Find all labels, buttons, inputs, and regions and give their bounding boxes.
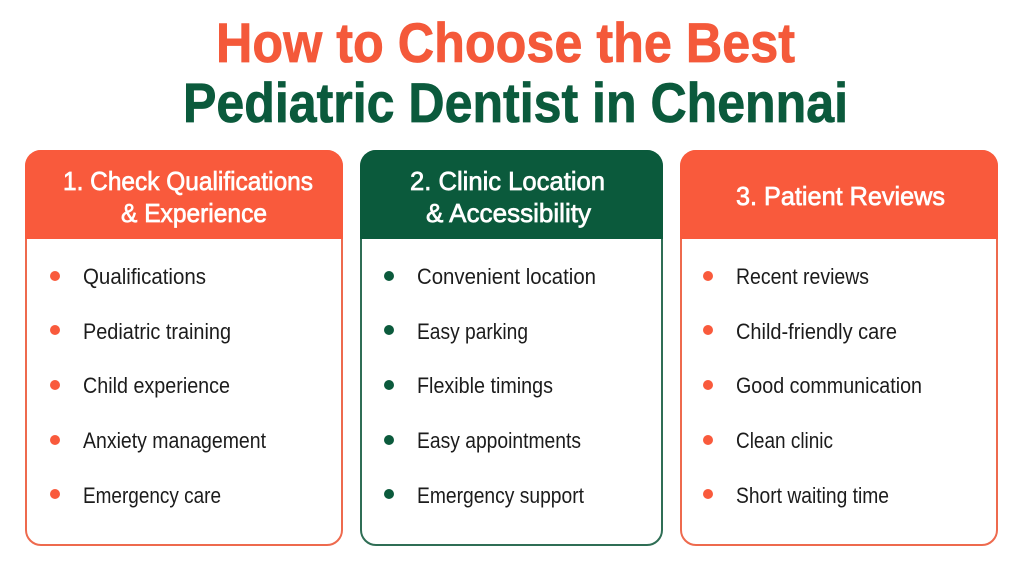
list: clinic location items: [384, 264, 596, 508]
list: patient reviews items: Good communication: [736, 373, 922, 398]
list: qualifications items: Pediatric training: [83, 319, 231, 344]
panel header: clinic location: [360, 150, 663, 239]
list: qualifications items: Child experience: [83, 373, 230, 398]
list: clinic location items: Easy appointments: [417, 428, 581, 453]
list: qualifications items: [50, 264, 266, 508]
list: patient reviews items: Child-friendly care: [736, 319, 897, 344]
list: patient reviews items: [703, 264, 922, 508]
list: clinic location items: Easy parking: [417, 319, 528, 344]
list: patient reviews items: Clean clinic: [736, 428, 833, 453]
panel: clinic location and accessibility: [360, 150, 663, 545]
list: qualifications items: Anxiety management: [83, 428, 266, 453]
list: patient reviews items: Recent reviews: [736, 264, 869, 289]
panel header: qualifications: [25, 150, 343, 239]
panel header: patient reviews: [680, 150, 998, 239]
title: [183, 11, 848, 134]
panel header: qualifications: 1. Check Qualifications: [63, 166, 313, 196]
panel header: qualifications: & Experience: [121, 198, 267, 228]
list: qualifications items: Emergency care: [83, 483, 221, 508]
title: Pediatric Dentist in Chennai: [183, 71, 848, 134]
title: How to Choose the Best: [216, 11, 795, 74]
panel header: clinic location: 2. Clinic Location: [410, 166, 605, 196]
panel header: clinic location: & Accessibility: [426, 198, 591, 228]
panel: patient reviews: [680, 150, 998, 545]
list: clinic location items: Emergency support: [417, 483, 584, 508]
list: qualifications items: Qualifications: [83, 264, 206, 289]
list: clinic location items: Flexible timings: [417, 373, 553, 398]
panel header: patient reviews: 3. Patient Reviews: [736, 181, 945, 211]
list: patient reviews items: Short waiting time: [736, 483, 889, 508]
list: clinic location items: Convenient location: [417, 264, 596, 289]
panel: qualifications and experience: [25, 150, 343, 545]
